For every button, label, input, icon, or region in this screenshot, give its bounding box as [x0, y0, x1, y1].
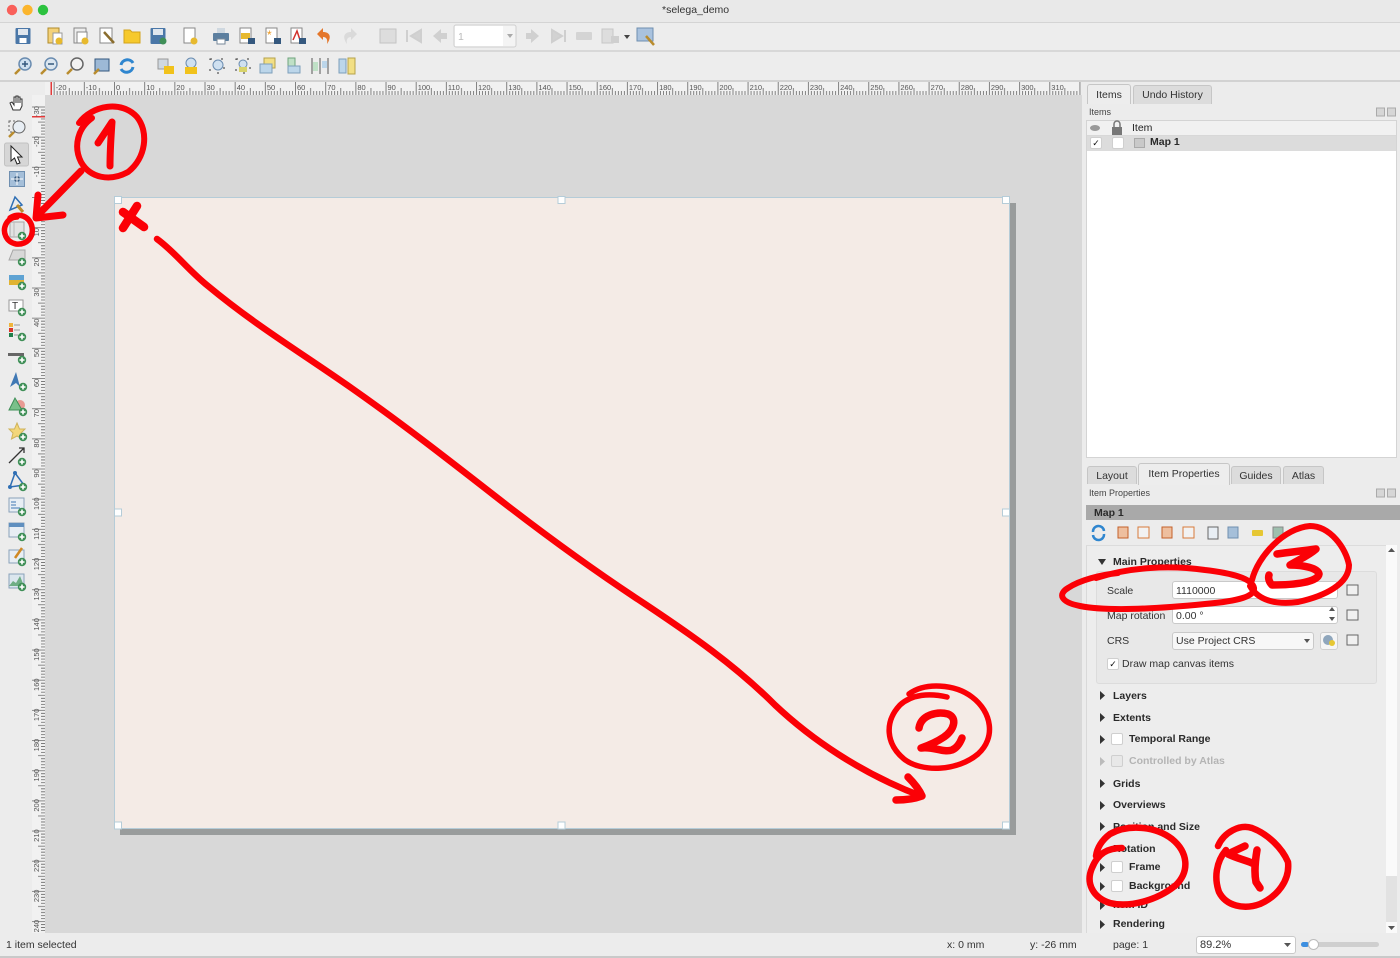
- icon: export svg: [266, 28, 281, 44]
- section: Background: [1111, 880, 1123, 892]
- vertical ruler: 120: [32, 558, 41, 570]
- tab: Guides: Guides: [1239, 470, 1273, 482]
- annotation: diagonal drag line: [157, 239, 921, 796]
- annotation: scale field oval: [1062, 567, 1254, 609]
- vertical ruler: 60: [32, 379, 41, 387]
- icon: group items: [210, 59, 224, 73]
- icon: crs globe: [1323, 635, 1335, 646]
- icon: preview atlas: [380, 29, 396, 43]
- right dock panel: Controlled by Atlas: [1129, 755, 1225, 767]
- vertical ruler: -20: [32, 136, 41, 147]
- icon: save: [16, 28, 30, 44]
- vertical ruler: 220: [32, 859, 41, 872]
- tab: Item Properties: Item Properties: [1148, 468, 1220, 480]
- icon: export image: [240, 28, 255, 44]
- crs dropdown: [1172, 632, 1314, 650]
- icon: raise items: [260, 58, 275, 73]
- feature spin box: 1: [458, 31, 464, 43]
- vertical ruler: 230: [32, 890, 41, 902]
- vertical ruler: 10: [32, 228, 41, 236]
- vertical ruler: 90: [32, 469, 41, 478]
- annotation: arrow head: [896, 777, 922, 800]
- section: Rotation: Rotation: [1113, 843, 1156, 855]
- title bar: [0, 0, 1400, 23]
- item properties panel header: Item Properties: [1089, 488, 1150, 498]
- icon: add north arrow: [10, 372, 27, 391]
- icon: redo: [344, 28, 357, 44]
- icon: export pdf: [291, 28, 306, 44]
- right panel small icons: [1090, 108, 1396, 947]
- icon: add shape: [9, 398, 27, 416]
- horizontal ruler: 70: [327, 83, 336, 92]
- vertical ruler: 180: [32, 739, 41, 751]
- icon: duplicate layout: [74, 28, 88, 44]
- icon: align items: [288, 58, 300, 73]
- horizontal ruler: 110: [448, 83, 460, 92]
- horizontal ruler: 100: [418, 83, 430, 92]
- horizontal ruler: 200: [719, 83, 732, 92]
- annotation: arrow to add map tool: [36, 171, 81, 218]
- vertical ruler: 160: [32, 678, 41, 691]
- map rotation input: 0.00 °: [1176, 610, 1204, 622]
- icon: zoom tool: [9, 121, 25, 137]
- horizontal ruler: -10: [86, 83, 97, 92]
- map rotation label: Map rotation: [1107, 610, 1165, 622]
- section: Position and Size: Position and Size: [1113, 821, 1200, 833]
- y coordinate: y: -26 mm: [1030, 939, 1077, 951]
- icon: first feature: [407, 30, 421, 42]
- crs dropdown: Use Project CRS: [1176, 635, 1255, 647]
- horizontal ruler: 190: [689, 83, 702, 92]
- tab: Layout: [1087, 466, 1137, 484]
- icon: lock items: [158, 59, 174, 74]
- icon: add scale bar: [8, 353, 26, 364]
- icon: add pages: [184, 28, 198, 44]
- horizontal ruler: 210: [750, 83, 762, 92]
- row: Map 1: ✓: [1092, 138, 1100, 148]
- horizontal ruler: 160: [599, 83, 611, 92]
- scale input: 1110000: [1176, 585, 1215, 597]
- zoom combo: 89.2%: [1200, 939, 1231, 951]
- draw map canvas items label: Draw map canvas items: [1122, 658, 1234, 670]
- tab: Layout: Layout: [1096, 470, 1128, 482]
- left toolbar background: [0, 82, 32, 933]
- icon: ungroup items: [236, 59, 250, 73]
- icon: add marker: [9, 423, 27, 441]
- main properties group box: [1096, 571, 1377, 684]
- vertical ruler: 20: [32, 258, 41, 266]
- toolbar backgrounds: [0, 23, 1400, 82]
- items table header: [1087, 121, 1396, 136]
- horizontal ruler: 10: [146, 83, 155, 92]
- icon: last feature: [552, 30, 565, 42]
- horizontal ruler: 230: [810, 83, 822, 92]
- row: Map 1: [1087, 136, 1396, 151]
- layout canvas: [45, 95, 1082, 933]
- vertical ruler: 110: [32, 528, 41, 540]
- status bar: [0, 933, 1400, 958]
- horizontal ruler: 310: [1051, 83, 1064, 92]
- tab: Items: Items: [1096, 89, 1122, 101]
- tab: Undo History: [1133, 85, 1212, 104]
- page shadow: [120, 203, 1016, 835]
- crs label: CRS: [1107, 635, 1129, 647]
- icon: edit nodes: [10, 197, 23, 212]
- map 1 header bar: [1086, 505, 1400, 520]
- spin and combo arrows: [1284, 548, 1395, 947]
- icon: print: [213, 28, 229, 44]
- icon: add 3d map: [9, 250, 26, 266]
- vertical ruler: 150: [32, 648, 41, 661]
- annotation: circled number 3: [1250, 526, 1349, 603]
- top toolbar icons: [16, 25, 654, 47]
- scale label: Scale: [1107, 585, 1133, 597]
- icon: move item content: [10, 172, 24, 186]
- icon: next feature: [526, 29, 539, 43]
- horizontal ruler: 280: [961, 83, 973, 92]
- window title: *selega_demo: [662, 4, 729, 16]
- selection handles: [114, 196, 1010, 829]
- icon: lock column: [1112, 121, 1122, 135]
- horizontal ruler: 0: [116, 83, 120, 92]
- icon: export svg: *: [267, 28, 272, 42]
- icon: previous feature: [433, 29, 447, 43]
- icon: add label: [9, 300, 26, 316]
- vertical ruler: 50: [32, 349, 41, 357]
- icon: resize items: [339, 58, 355, 74]
- vertical ruler: 170: [32, 709, 41, 721]
- right dock panel: Temporal Range: [1129, 733, 1210, 745]
- icon: add elevation profile: [9, 574, 26, 591]
- icon: zoom in: [15, 58, 31, 74]
- right dock panel: Frame: [1129, 861, 1161, 873]
- icon: add label: T: [12, 301, 18, 312]
- window traffic lights: [7, 5, 48, 15]
- selection status: 1 item selected: [6, 939, 77, 951]
- horizontal ruler: 60: [297, 83, 305, 92]
- map item page: [114, 197, 1010, 829]
- horizontal ruler: 270: [931, 83, 943, 92]
- horizontal ruler: 220: [780, 83, 792, 92]
- horizontal ruler: 300: [1021, 83, 1034, 92]
- items table header: Item: [1132, 122, 1152, 134]
- vertical ruler: 70: [32, 409, 41, 417]
- draw map canvas items checkbox: [1107, 658, 1119, 670]
- page number: page: 1: [1113, 939, 1148, 951]
- tab: Item Properties: [1138, 463, 1230, 485]
- icon: add legend: [9, 323, 26, 341]
- x coordinate: x: 0 mm: [947, 939, 984, 951]
- vertical ruler: 190: [32, 769, 41, 781]
- vertical ruler: 100: [32, 497, 41, 510]
- annotation: circled number 2: [889, 686, 989, 768]
- annotation: circled number 1: [77, 107, 144, 177]
- icon: layout manager: [100, 28, 114, 43]
- icon: add arrow: [9, 448, 26, 466]
- icon: items panel float and close: [1376, 108, 1396, 116]
- icon: add node item: [8, 471, 27, 491]
- icon: undo: [317, 28, 330, 44]
- icon: properties panel float and close: [1376, 489, 1396, 497]
- horizontal ruler: [45, 82, 1081, 95]
- properties scroll area: [1086, 545, 1387, 934]
- icon: zoom full: [94, 59, 109, 74]
- horizontal ruler: 240: [840, 83, 853, 92]
- tab: Atlas: [1283, 466, 1324, 484]
- tab: Guides: [1231, 466, 1281, 484]
- icon: zoom out: [41, 58, 57, 74]
- tab: Items: [1087, 84, 1131, 104]
- right dock panel: [1083, 82, 1400, 933]
- icon: pan hand: [10, 96, 22, 110]
- second toolbar icons: [15, 58, 355, 74]
- tab: Atlas: Atlas: [1292, 470, 1315, 482]
- icon: add picture: [9, 275, 26, 290]
- section: Overviews: Overviews: [1113, 799, 1166, 811]
- section: Item ID: Item ID: [1113, 899, 1148, 911]
- horizontal ruler: 250: [870, 83, 883, 92]
- section: Temporal Range: [1111, 733, 1123, 745]
- icon: distribute items: [312, 58, 328, 74]
- vertical ruler: 0: [32, 200, 41, 204]
- scrollbar: [1386, 545, 1397, 933]
- icon: refresh: [121, 60, 133, 72]
- vertical ruler: 80: [32, 439, 41, 448]
- horizontal ruler: 30: [206, 83, 215, 92]
- icon: open folder: [124, 30, 140, 43]
- horizontal ruler: 170: [629, 83, 641, 92]
- items list: [1086, 120, 1397, 458]
- icon: visibility column: [1090, 125, 1100, 131]
- section: Controlled by Atlas: [1111, 755, 1123, 767]
- horizontal ruler: 80: [357, 83, 366, 92]
- annotation: start cross: [123, 206, 144, 228]
- icon: select tool (active): [4, 143, 28, 166]
- icon: new layout: [48, 28, 62, 44]
- icon: zoom 100%: [67, 58, 83, 74]
- section: Rendering: Rendering: [1113, 918, 1165, 930]
- icon: atlas settings: [637, 28, 654, 45]
- horizontal ruler: 40: [237, 83, 245, 92]
- disclosure triangles: [1098, 559, 1106, 929]
- row: Map 1: Map 1: [1150, 136, 1180, 148]
- vertical ruler: -10: [32, 166, 41, 177]
- scale input: [1172, 581, 1338, 599]
- icon: save as template: [150, 28, 166, 44]
- crs select button: [1320, 632, 1338, 650]
- vertical ruler: 30: [32, 288, 41, 297]
- horizontal ruler: 90: [388, 83, 396, 92]
- horizontal ruler: 50: [267, 83, 275, 92]
- draw map canvas items checkbox: ✓: [1109, 659, 1117, 669]
- icon: add fixed table: [9, 548, 26, 566]
- zoom slider: [1301, 942, 1379, 947]
- vertical ruler: 240: [32, 920, 41, 932]
- feature spin box: [454, 25, 516, 47]
- horizontal ruler: 20: [176, 83, 185, 92]
- tab: Undo History: Undo History: [1142, 89, 1203, 101]
- section: Frame: [1111, 861, 1123, 873]
- vertical ruler: [32, 95, 45, 933]
- data-defined override buttons: [1347, 585, 1358, 645]
- icon: export atlas: [602, 29, 630, 43]
- horizontal ruler: 180: [659, 83, 672, 92]
- icon: add map: [10, 222, 26, 240]
- icon: add attribute table: [9, 523, 26, 541]
- vertical ruler: 200: [32, 799, 41, 812]
- vertical ruler: -30: [32, 106, 41, 117]
- vertical ruler: 140: [32, 618, 41, 631]
- left tool icons: [4, 96, 28, 591]
- map rotation input: [1172, 606, 1338, 624]
- horizontal ruler: 290: [991, 83, 1003, 92]
- horizontal ruler: 150: [569, 83, 581, 92]
- section: Grids: Grids: [1113, 778, 1140, 790]
- zoom combo: [1196, 936, 1296, 954]
- horizontal ruler: 140: [538, 83, 551, 92]
- horizontal ruler: 130: [508, 83, 521, 92]
- section: Layers: Layers: [1113, 690, 1147, 702]
- icon: add html: [9, 498, 26, 516]
- section: Extents: Extents: [1113, 712, 1151, 724]
- items panel header: Items: [1089, 107, 1111, 117]
- right dock panel: Background: [1129, 880, 1190, 892]
- annotation: circle around add map icon: [4, 215, 32, 244]
- annotation: circle around frame and background: [1090, 828, 1185, 904]
- icon: print atlas: [576, 32, 592, 40]
- main properties heading: Main Properties: [1113, 556, 1192, 568]
- vertical ruler: 210: [32, 829, 41, 842]
- horizontal ruler: 120: [478, 83, 491, 92]
- horizontal ruler: -20: [56, 83, 67, 92]
- vertical ruler: 40: [32, 319, 41, 327]
- map 1 header bar: Map 1: [1094, 507, 1124, 519]
- horizontal ruler: 260: [900, 83, 913, 92]
- icon: unlock all: [185, 58, 197, 74]
- item properties toolbar icons: [1093, 526, 1283, 540]
- vertical ruler: 130: [32, 588, 41, 600]
- annotation: circled number 4: [1216, 827, 1288, 907]
